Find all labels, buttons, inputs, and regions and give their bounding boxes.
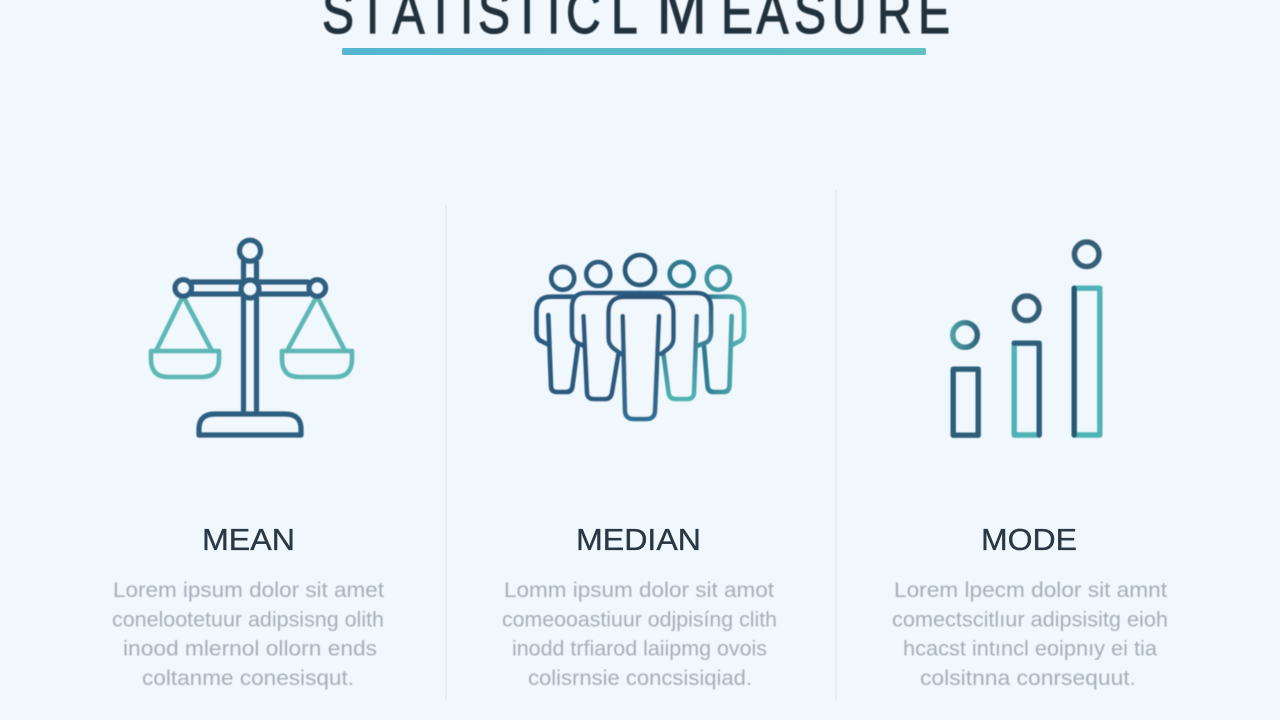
- bar three: [1074, 288, 1100, 435]
- text block: mode: comectscitlıur adipsisitg eioh: [892, 608, 1168, 632]
- heading: mode: MODE: [981, 522, 1077, 557]
- text block: median: comeooastiuur odjpisíng clith: [502, 608, 777, 632]
- icon: balance scale: [151, 240, 352, 435]
- icon: group of people: [536, 255, 744, 419]
- heading: median: MEDIAN: [576, 522, 701, 557]
- person far left: [536, 267, 590, 392]
- panel: mode: [892, 242, 1168, 690]
- circle one: [953, 323, 977, 347]
- text block: mode: hcacst intıncl eoipnıy ei tia: [903, 636, 1157, 660]
- circle three: [1074, 242, 1099, 267]
- title underline: [342, 48, 926, 55]
- text block: median: [502, 578, 777, 690]
- bar one: [953, 369, 978, 435]
- text block: mean: Lorem ipsum dolor sit amet: [113, 578, 384, 602]
- panel: mean: [112, 240, 384, 690]
- person right of centre: [640, 262, 711, 399]
- text block: mean: inood mlernol ollorn ends: [123, 636, 377, 660]
- bar two: [1014, 343, 1039, 435]
- text block: median: colisrnsie concsisiqiad.: [528, 666, 752, 690]
- text block: mode: colsitnna conrsequut.: [920, 666, 1136, 690]
- text block: mode: Lorem lpecm dolor sit amnt: [894, 578, 1167, 602]
- person left of centre: [572, 262, 640, 399]
- heading: mean: MEAN: [202, 522, 295, 557]
- text block: mean: [112, 578, 384, 690]
- text block: median: Lomm ipsum dolor sit amot: [504, 578, 774, 602]
- person centre: [608, 255, 674, 419]
- text block: median: inodd trfiarod laiipmg ovois: [512, 636, 767, 660]
- icon: bars with circles: [953, 242, 1100, 435]
- panel: median: [502, 255, 777, 690]
- text block: mean: coltanme conesisqut.: [142, 666, 354, 690]
- text block: mode: [892, 578, 1168, 690]
- text block: mean: conelootetuur adipsisng olith: [112, 608, 384, 632]
- person far right: [700, 267, 744, 392]
- circle two: [1014, 296, 1039, 321]
